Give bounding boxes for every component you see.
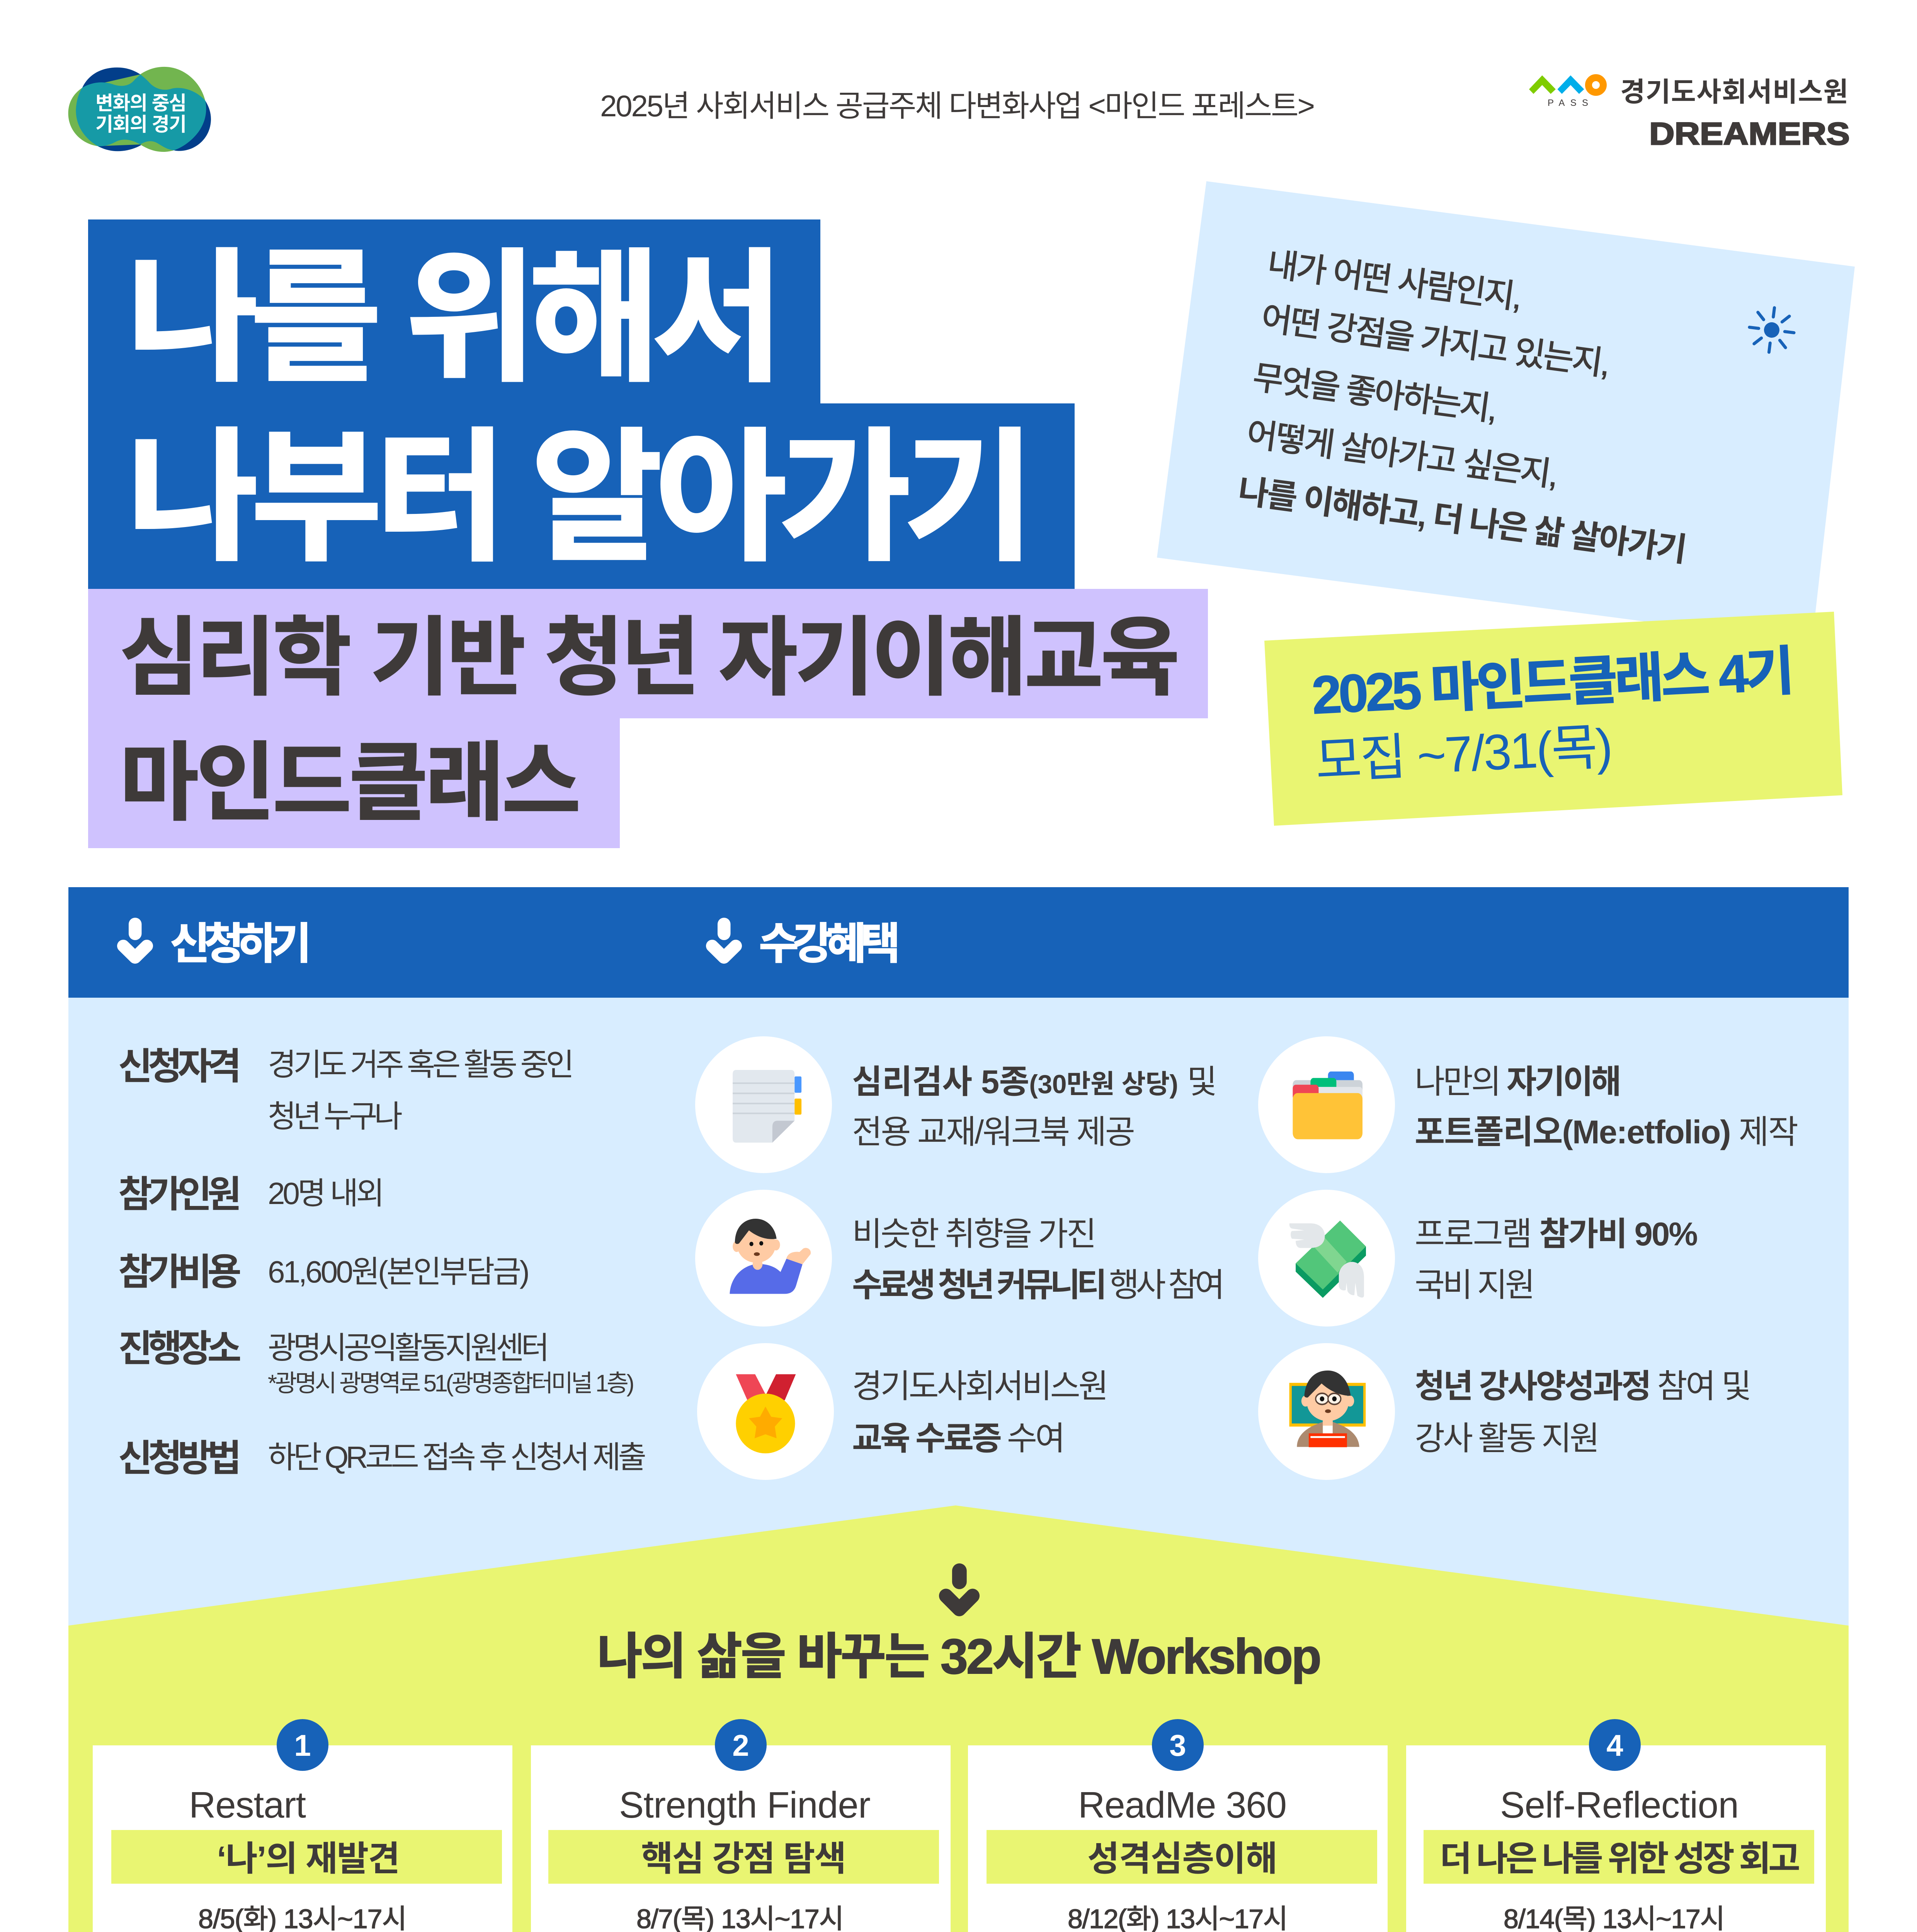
heading: 수강혜택: 수강혜택	[759, 920, 900, 968]
benefit: workbook: 심리검사 5종(30만원 상당) 및	[852, 1064, 1217, 1100]
icon: teacher	[1291, 1371, 1364, 1447]
workshop card 1: Restart	[189, 1784, 306, 1826]
logo: 경기도사회서비스원 DREAMERS: DREAMERS	[1649, 116, 1850, 151]
recruitment badge: 2025 마인드클래스 4기	[1310, 641, 1796, 725]
application details: 참가인원	[118, 1174, 242, 1215]
logo: 변화의 중심 기회의 경기: 변화의 중심	[95, 92, 187, 114]
benefit: subsidy	[1258, 1190, 1698, 1327]
application details: 경기도 거주 혹은 활동 중인	[268, 1048, 574, 1082]
benefit: workbook	[695, 1036, 1217, 1173]
benefit: community	[695, 1190, 1225, 1327]
icon: sun	[1747, 305, 1797, 355]
workshop card 2	[531, 1719, 951, 1932]
logo: 변화의 중심 기회의 경기: 기회의 경기	[95, 114, 187, 135]
application details: 광명시공익활동지원센터	[268, 1331, 549, 1365]
workshop card 3: 3	[1169, 1728, 1186, 1762]
benefit: instructor: 강사 활동 지원	[1415, 1420, 1600, 1457]
icon: down heart arrow	[712, 918, 736, 957]
application details: 61,600원(본인부담금)	[268, 1255, 530, 1289]
icon: flying money	[1289, 1221, 1366, 1298]
workshop card 4: 더 나은 나를 위한 성장 회고	[1440, 1840, 1800, 1878]
benefit: portfolio: 포트폴리오(Me:etfolio) 제작	[1415, 1114, 1798, 1151]
workshop card 3: 성격심층이해	[1087, 1840, 1277, 1878]
logo: 경기도사회서비스원 DREAMERS: 경기도사회서비스원	[1620, 77, 1848, 107]
icon: person	[730, 1219, 811, 1294]
header caption: 2025년 사회서비스 공급주체 다변화사업 <마인드 포레스트>	[600, 89, 1315, 123]
application details: 신청자격	[118, 1046, 242, 1087]
note card: 내가 어떤 사람인지,	[1266, 245, 1524, 316]
subtitle block: 심리학 기반 청년 자기이해교육	[120, 610, 1180, 706]
benefit: portfolio: 나만의 자기이해	[1415, 1064, 1621, 1100]
icon: down heart arrow	[123, 918, 147, 957]
workshop card 3	[968, 1719, 1388, 1932]
benefit: instructor	[1258, 1343, 1752, 1480]
benefit: instructor: 청년 강사양성과정 참여 및	[1415, 1368, 1752, 1405]
note card: 어떤 강점을 가지고 있는지,	[1259, 299, 1613, 383]
heading: 신청하기: 신청하기	[170, 920, 311, 968]
application details: *광명시 광명역로 51(광명종합터미널 1층)	[268, 1370, 634, 1397]
benefit: community: 수료생 청년 커뮤니티 행사 참여	[852, 1267, 1225, 1304]
panel: light blue background	[68, 998, 1849, 1631]
section header band	[68, 887, 1849, 998]
workshop card 4	[1406, 1719, 1826, 1932]
application details: 하단 QR코드 접속 후 신청서 제출	[268, 1440, 646, 1475]
application details: 20명 내외	[268, 1176, 384, 1211]
icon: document	[733, 1070, 801, 1143]
recruitment badge	[1264, 612, 1842, 826]
benefit: subsidy: 프로그램 참가비 90%	[1415, 1216, 1698, 1253]
note card: 나를 이해하고, 더 나은 삶 살아가기	[1236, 472, 1689, 569]
workshop card 2: Strength Finder	[619, 1784, 871, 1826]
workshop card 1	[93, 1719, 512, 1932]
benefit: community: 비슷한 취향을 가진	[852, 1216, 1097, 1253]
title block: 나부터 알아가기	[127, 418, 1035, 578]
benefit: portfolio	[1258, 1036, 1798, 1173]
workshop card 2: 핵심 강점 탐색	[641, 1840, 846, 1878]
icon: folder	[1293, 1071, 1362, 1139]
panel: workshop	[68, 1505, 1849, 1932]
benefit: certificate: 교육 수료증 수여	[852, 1420, 1065, 1457]
application details: 참가비용	[118, 1252, 242, 1293]
note card: 무엇을 좋아하는지,	[1251, 359, 1500, 428]
note card	[1157, 181, 1855, 643]
application details: 신청방법	[118, 1438, 242, 1479]
benefit: subsidy: 국비 지원	[1415, 1267, 1535, 1304]
application details: 청년 누구나	[268, 1099, 403, 1134]
note card: 어떻게 살아가고 싶은지,	[1245, 415, 1561, 494]
workshop card 3: ReadMe 360	[1078, 1784, 1287, 1826]
benefit: workbook: 전용 교재/워크북 제공	[852, 1114, 1135, 1151]
logo: 변화의 중심 기회의 경기	[68, 67, 211, 152]
workshop card 1: ‘나’의 재발견	[217, 1840, 400, 1878]
workshop card 4: Self-Reflection	[1500, 1784, 1739, 1826]
benefit: certificate: 경기도사회서비스원	[852, 1368, 1109, 1405]
subtitle block	[88, 589, 1208, 848]
workshop card 1: 1	[294, 1728, 311, 1762]
icon: down heart arrow	[946, 1563, 973, 1609]
icon: medal	[736, 1374, 796, 1453]
heading: workshop: 나의 삶을 바꾸는 32시간 Workshop	[597, 1629, 1322, 1684]
workshop card 4: 4	[1606, 1728, 1623, 1762]
title block	[88, 219, 1075, 589]
benefit: certificate	[697, 1343, 1109, 1480]
application details: 진행장소	[118, 1328, 242, 1369]
logo: 경기도사회서비스원 DREAMERS: PASS	[1548, 98, 1588, 108]
application details	[118, 1046, 646, 1479]
recruitment badge: 모집 ~7/31(목)	[1314, 718, 1614, 789]
title block: 나를 위해서	[127, 239, 784, 399]
logo: 경기도사회서비스원 DREAMERS	[1529, 75, 1850, 151]
subtitle block: 마인드클래스	[120, 735, 581, 831]
workshop card 2: 2	[732, 1728, 749, 1762]
